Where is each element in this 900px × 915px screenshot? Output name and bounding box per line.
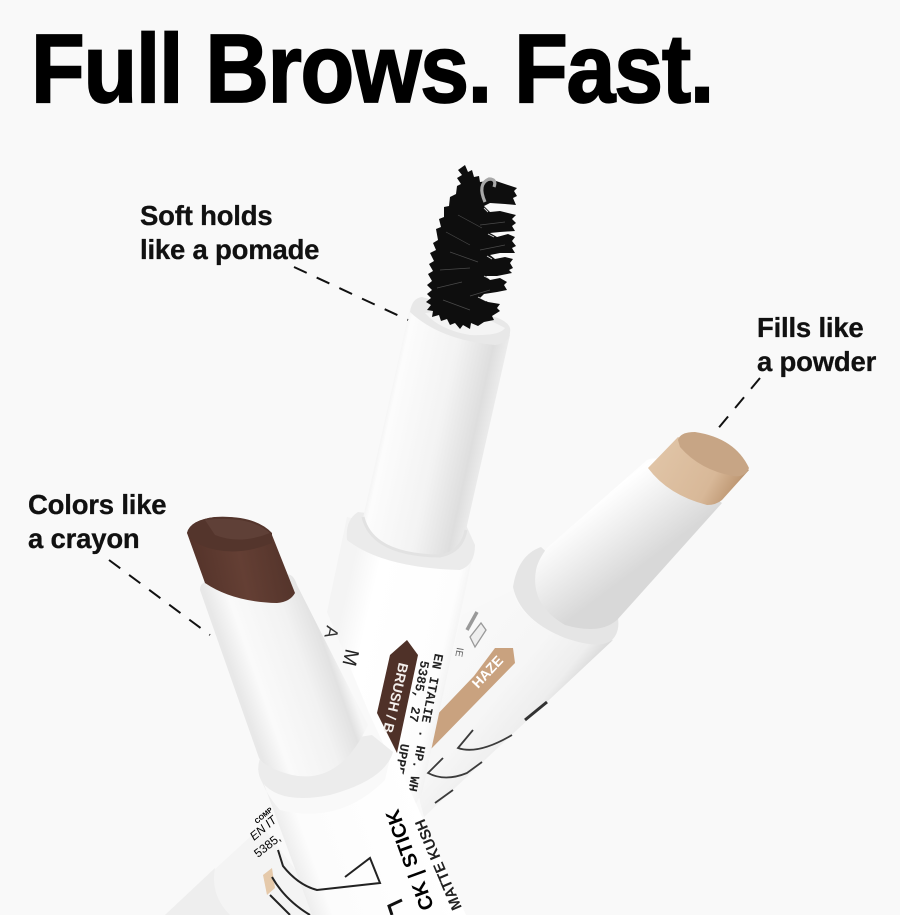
brown pigment	[187, 517, 295, 603]
tan outline logo marks	[428, 730, 512, 803]
tan pigment	[648, 432, 749, 505]
brown stick side print	[382, 806, 466, 913]
label: colors	[28, 489, 166, 554]
label: soft holds	[140, 200, 319, 265]
label: fills	[757, 312, 877, 377]
back stick fine print: COMP	[254, 806, 275, 826]
brush label and text: M	[337, 647, 363, 668]
back stick fine print	[247, 806, 284, 860]
brown stick body	[258, 750, 466, 915]
back stick fine print: 5385,	[251, 831, 284, 860]
brown stick collar	[258, 735, 393, 798]
brown stick	[187, 517, 466, 915]
centre stick body	[327, 517, 475, 805]
haze label	[431, 648, 515, 749]
spoolie brush	[426, 165, 517, 329]
brown stick outline logo	[270, 850, 380, 915]
centre stick rim	[410, 297, 510, 345]
tan stick collar	[513, 547, 618, 645]
brown stick side print: CK | STICK	[382, 806, 439, 913]
brown stick tube	[200, 574, 368, 776]
title: Full Brows. Fast.	[31, 13, 713, 123]
brush label and text: UPPER	[390, 742, 412, 784]
pointer: soft holds	[294, 267, 408, 320]
haze label: HAZE	[468, 652, 506, 691]
tan stick	[417, 432, 749, 817]
brush label and text: EN ITALIE . HP. WH	[404, 652, 446, 793]
brush label and text: 5385, 27	[405, 659, 432, 723]
label: fills: a powder	[757, 346, 877, 377]
label: colors: a crayon	[28, 523, 140, 554]
back stick, bottom left	[165, 806, 330, 915]
pointer: fills	[716, 378, 760, 431]
tan stick body	[417, 590, 613, 817]
label: colors: Colors like	[28, 489, 166, 520]
tan stick tube	[535, 458, 722, 629]
centre brush stick	[320, 165, 517, 805]
tan stick small icon	[467, 612, 486, 647]
label: soft holds: like a pomade	[140, 234, 319, 265]
pointer: colors	[109, 560, 210, 635]
centre stick collar	[347, 512, 475, 570]
label: soft holds: Soft holds	[140, 200, 272, 231]
back stick fine print: EN IT	[247, 812, 281, 843]
brown stick side print: MATTE KUSH	[412, 816, 466, 913]
brush label and text: BRUSH / B	[380, 661, 412, 735]
centre stick tube	[363, 308, 510, 556]
brush label and text	[320, 624, 465, 793]
brush label and text: IE	[452, 646, 465, 658]
label: fills: Fills like	[757, 312, 864, 343]
brush label and text: A	[320, 624, 343, 640]
